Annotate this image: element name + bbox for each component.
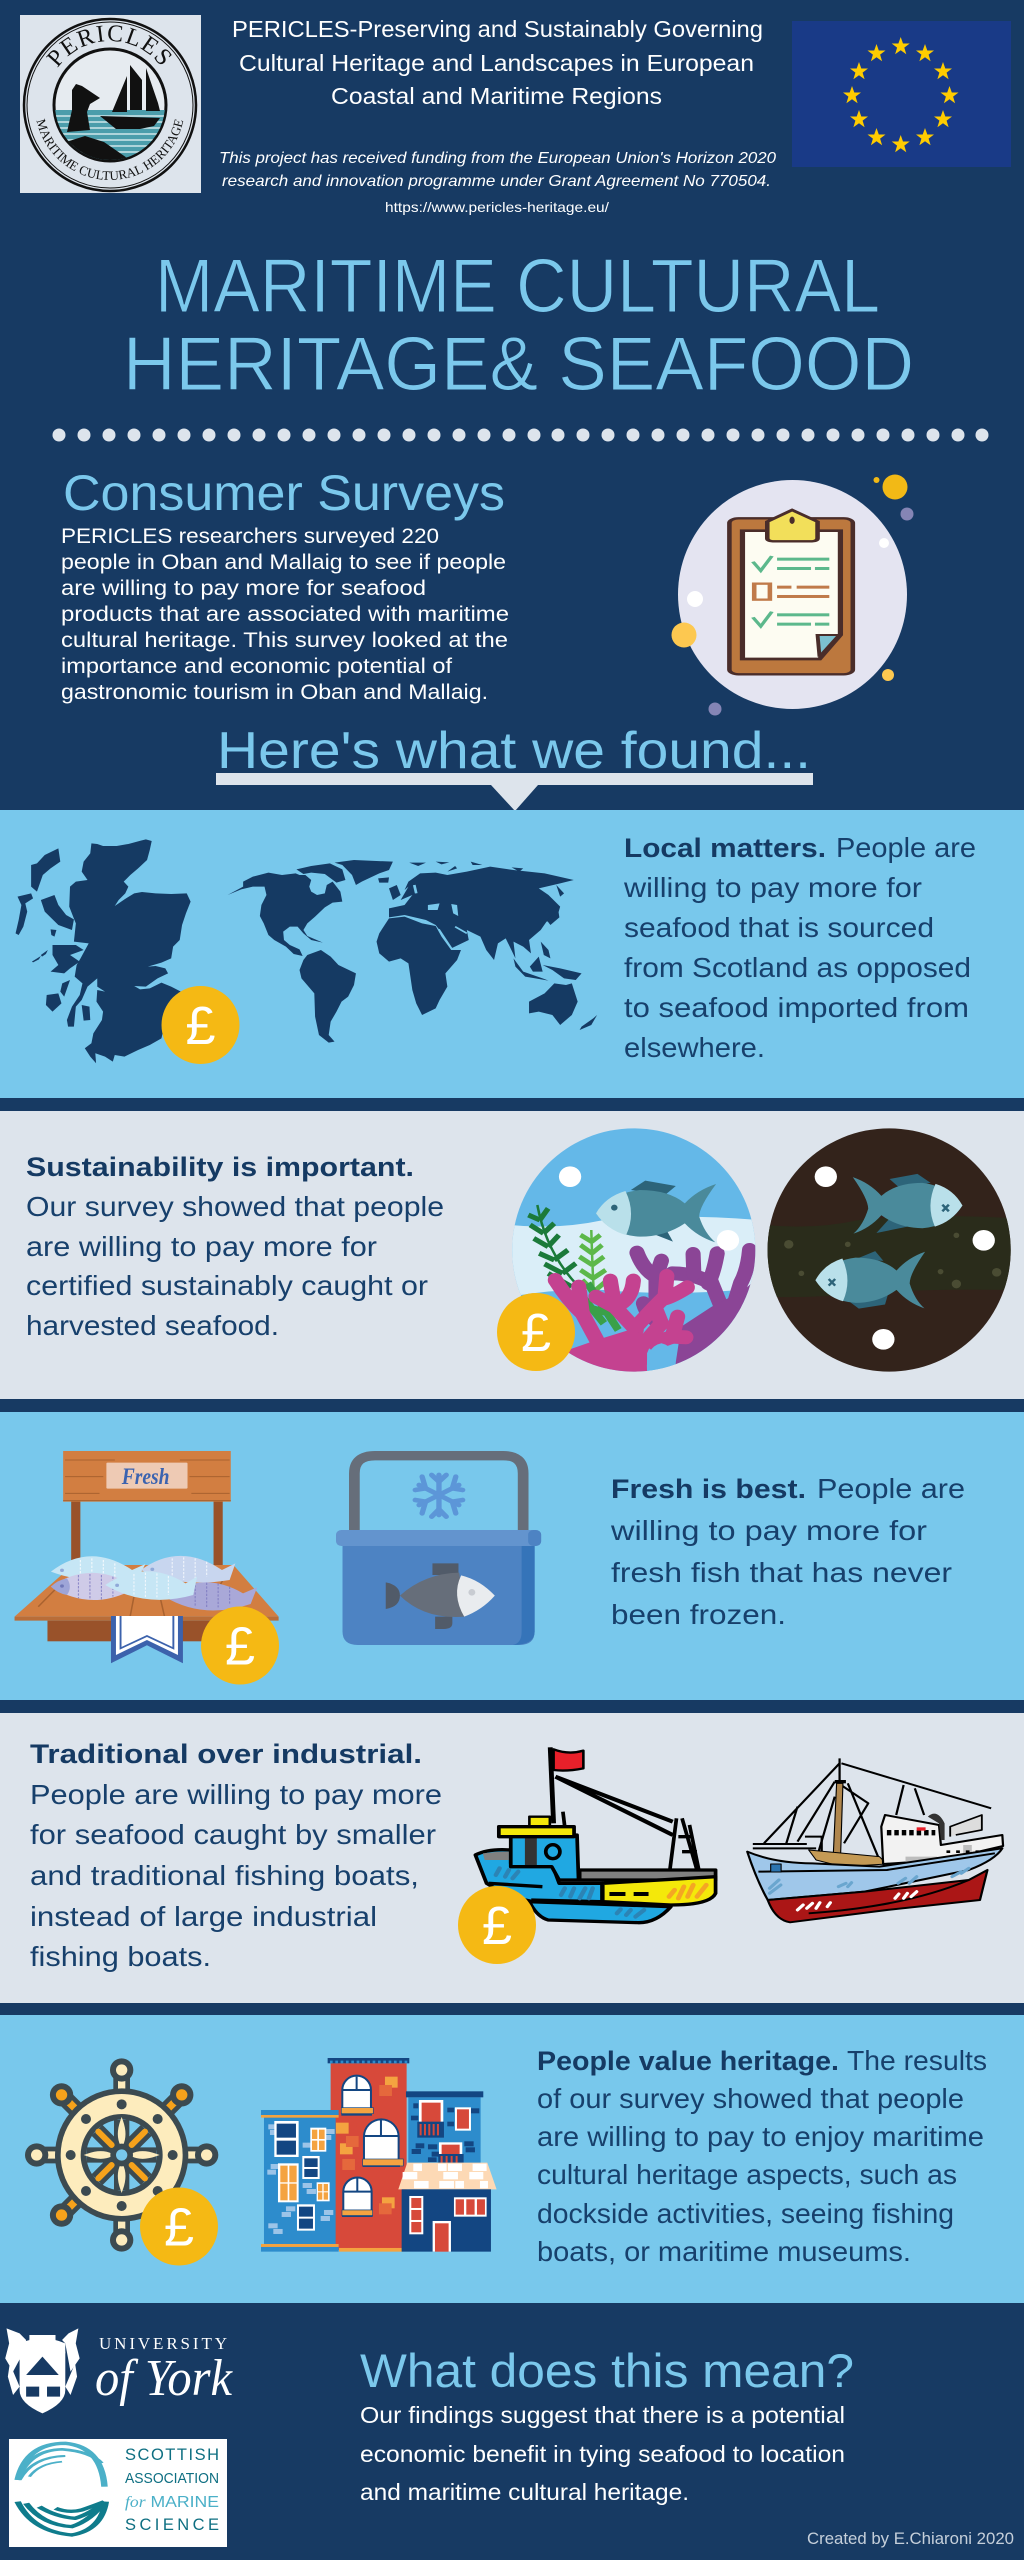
text: local matters: Local matters. xyxy=(624,833,826,863)
project title xyxy=(232,16,763,109)
funding statement: research and innovation programme under Grant Agreement No 770504. xyxy=(222,173,771,190)
text: traditional: and traditional fishing boats, xyxy=(30,1860,419,1891)
text: sustainability: Sustainability is important. xyxy=(26,1152,414,1182)
icon: EU flag xyxy=(792,21,1011,167)
logo: PERICLES xyxy=(20,15,201,193)
text: local matters: elsewhere. xyxy=(624,1032,765,1063)
section: consumer surveys xyxy=(61,465,914,811)
text: sustainability: harvested seafood. xyxy=(26,1310,279,1341)
text: people value heritage: The results xyxy=(847,2045,987,2076)
logo: Scottish Association for Marine Science xyxy=(9,2439,227,2547)
text: conclusion xyxy=(360,2402,845,2505)
illustration: healthy sea circle xyxy=(510,1127,759,1377)
illustration: polluted sea circle xyxy=(766,1127,1014,1373)
icon: ship's wheel xyxy=(25,2058,218,2252)
text: traditional: for seafood caught by smaller xyxy=(30,1819,436,1850)
main title xyxy=(123,244,914,407)
text: survey description: PERICLES researchers surveyed 220 xyxy=(61,525,439,548)
logo: University of York: of York xyxy=(95,2350,233,2407)
text: survey description: products that are associated with maritime xyxy=(61,603,509,626)
text: fresh is best: been frozen. xyxy=(611,1599,786,1630)
text: sustainability xyxy=(26,1152,444,1341)
map: world xyxy=(228,860,597,1043)
icon: clipboard in circle xyxy=(672,474,914,716)
text: survey description: people in Oban and Mallaig to see if people xyxy=(61,551,506,574)
text: survey description: cultural heritage. This survey looked at the xyxy=(61,629,508,652)
illustration: fish market stall: Fresh xyxy=(121,1464,170,1490)
text: traditional: fishing boats. xyxy=(30,1941,211,1972)
text: survey description: importance and economic potential of xyxy=(61,655,452,678)
heading: consumer surveys: Consumer Surveys xyxy=(63,465,505,521)
logo: Scottish Association for Marine Science: SCOTTISH xyxy=(125,2446,219,2464)
text: local matters xyxy=(623,832,976,1063)
icon: pound coin: £ xyxy=(225,1616,255,1676)
text: fresh is best: fresh fish that has never xyxy=(611,1557,952,1588)
text: traditional: Traditional over industrial. xyxy=(30,1739,422,1769)
icon: pound coin xyxy=(458,1886,536,1964)
logo: PERICLES: PERICLES xyxy=(46,25,172,68)
icon: pound coin: £ xyxy=(482,1896,512,1956)
logo: University of York xyxy=(5,2328,233,2413)
heading: what does this mean: What does this mean? xyxy=(360,2344,854,2397)
illustration: industrial fishing boat xyxy=(747,1758,1003,1922)
funding statement xyxy=(219,150,776,215)
text: credit: Created by E.Chiaroni 2020 xyxy=(807,2529,1014,2548)
text: local matters: People are xyxy=(836,832,976,863)
text: traditional: instead of large industrial xyxy=(30,1901,377,1932)
main title: HERITAGE& SEAFOOD xyxy=(123,322,914,407)
icon: pound coin xyxy=(140,2188,218,2266)
text: local matters: seafood that is sourced xyxy=(624,912,934,943)
text: fresh is best: willing to pay more for xyxy=(610,1515,927,1546)
logo: Scottish Association for Marine Science: for MARINE xyxy=(125,2494,219,2511)
panel: local matters xyxy=(0,810,1024,1098)
icon: pound coin xyxy=(162,986,240,1064)
text: sustainability: are willing to pay more for xyxy=(26,1231,377,1262)
map: Scotland xyxy=(16,839,191,1063)
header xyxy=(20,15,1011,215)
illustration: cool box with fish xyxy=(336,1456,541,1645)
text: conclusion: and maritime cultural heritage. xyxy=(360,2479,689,2505)
panel: people value heritage xyxy=(0,2015,1024,2303)
text: local matters: willing to pay more for xyxy=(623,872,922,903)
main title: MARITIME CULTURAL xyxy=(155,244,880,329)
text: people value heritage: dockside activities, seeing fishing xyxy=(537,2198,954,2229)
panel: sustainability xyxy=(0,1111,1024,1399)
text: sustainability: Our survey showed that people xyxy=(26,1191,444,1222)
text: fresh is best xyxy=(610,1473,965,1630)
illustration: fish market stall xyxy=(15,1451,279,1663)
project title: Cultural Heritage and Landscapes in European xyxy=(239,50,754,76)
icon: pound coin: £ xyxy=(164,2198,194,2258)
text: traditional: People are willing to pay more xyxy=(30,1779,442,1810)
heading: here's what we found xyxy=(216,722,813,811)
heading: here's what we found: Here's what we found... xyxy=(217,722,811,780)
text: people value heritage: People value heritage. xyxy=(537,2046,839,2076)
text: traditional xyxy=(30,1739,442,1972)
text: local matters: to seafood imported from xyxy=(624,992,969,1023)
text: survey description: gastronomic tourism in Oban and Mallaig. xyxy=(61,681,488,704)
logo: Scottish Association for Marine Science: ASSOCIATION xyxy=(125,2470,219,2487)
icon: pound coin: £ xyxy=(521,1303,551,1363)
text: conclusion: economic benefit in tying seafood to location xyxy=(360,2441,845,2467)
text: people value heritage xyxy=(537,2045,987,2267)
panel: traditional over industrial xyxy=(0,1713,1024,2003)
project title: Coastal and Maritime Regions xyxy=(331,83,662,109)
text: conclusion: Our findings suggest that there is a potential xyxy=(360,2402,845,2428)
text: survey description xyxy=(61,525,509,704)
icon: pound coin xyxy=(497,1293,575,1371)
text: people value heritage: are willing to pay to enjoy maritime xyxy=(537,2121,984,2152)
logo: PERICLES: MARITIME CULTURAL HERITAGE xyxy=(36,118,184,180)
footer xyxy=(5,2328,1014,2548)
text: fresh is best: People are xyxy=(817,1473,965,1504)
funding statement: This project has received funding from the European Union's Horizon 2020 xyxy=(219,150,776,167)
icon: pound coin xyxy=(201,1606,279,1684)
text: survey description: are willing to pay more for seafood xyxy=(61,577,426,600)
funding statement: https://www.pericles-heritage.eu/ xyxy=(385,199,609,215)
text: people value heritage: boats, or maritime museums. xyxy=(537,2236,911,2267)
text: people value heritage: cultural heritage aspects, such as xyxy=(537,2159,957,2190)
text: sustainability: certified sustainably caught or xyxy=(26,1270,428,1301)
text: fresh is best: Fresh is best. xyxy=(611,1474,806,1504)
icon: pound coin: £ xyxy=(185,996,216,1056)
logo: University of York: UNIVERSITY xyxy=(99,2334,227,2353)
logo: Scottish Association for Marine Science: SCIENCE xyxy=(125,2516,219,2534)
text: local matters: from Scotland as opposed xyxy=(624,952,971,983)
illustration: harbour buildings xyxy=(261,2058,497,2252)
project title: PERICLES-Preserving and Sustainably Governing xyxy=(232,16,763,42)
text: people value heritage: of our survey showed that people xyxy=(537,2083,964,2114)
illustration: traditional fishing boat xyxy=(475,1747,716,1923)
panel: fresh is best xyxy=(0,1412,1024,1700)
